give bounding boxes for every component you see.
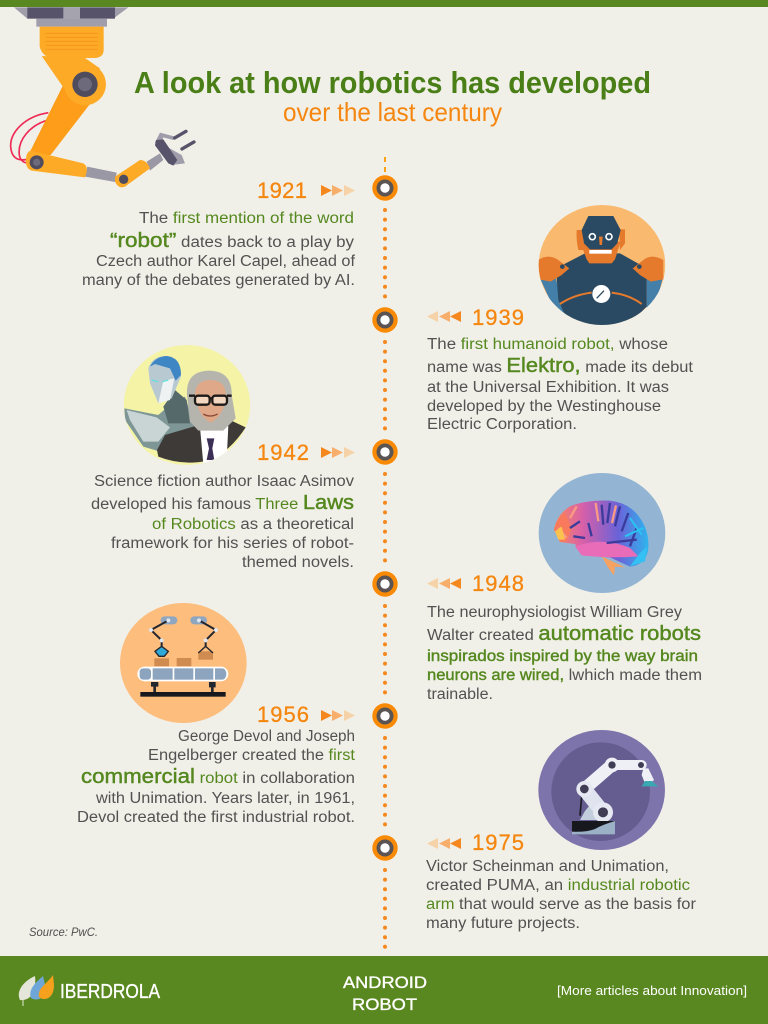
source note: Source: PwC. bbox=[29, 925, 98, 939]
panel: 1948 bbox=[427, 473, 702, 703]
text 1939: The first humanoid robot, whose bbox=[427, 336, 668, 353]
subtitle: over the last century bbox=[283, 97, 502, 127]
text 1921: many of the debates generated by AI. bbox=[82, 272, 355, 289]
top green bar bbox=[0, 0, 768, 7]
text 1956: commercial robot in collaboration bbox=[81, 765, 355, 788]
text 1939: at the Universal Exhibition. It was bbox=[427, 379, 669, 396]
text 1975 bbox=[426, 858, 696, 932]
text 1956: George Devol and Joseph bbox=[178, 728, 355, 745]
text 1921: The first mention of the word bbox=[139, 210, 354, 227]
arrows bbox=[427, 578, 461, 589]
icon: robot arm bbox=[11, 7, 194, 187]
text 1975: created PUMA, an industrial robotic bbox=[426, 877, 690, 894]
logo: Iberdrola: IBERDROLA bbox=[60, 981, 161, 1003]
node 1942 bbox=[372, 439, 398, 465]
panel: 1921 bbox=[82, 178, 356, 289]
node 1956 bbox=[372, 703, 398, 729]
text 1975: many future projects. bbox=[426, 915, 580, 932]
panel: 1956 bbox=[77, 603, 356, 826]
text 1975: arm that would serve as the basis for bbox=[426, 896, 696, 913]
text 1939: name was Elektro, made its debut bbox=[427, 354, 694, 377]
text 1956: Engelberger created the first bbox=[148, 747, 356, 764]
text 1942: framework for his series of robot- bbox=[111, 535, 354, 552]
year 1921: 1921 bbox=[257, 178, 307, 203]
footer title bbox=[343, 973, 427, 1014]
icon: industrial robot arm bbox=[538, 730, 665, 850]
text 1948 bbox=[427, 604, 702, 703]
text 1956 bbox=[77, 728, 356, 826]
text 1956: with Unimation. Years later, in 1961, bbox=[95, 790, 355, 807]
text 1948: Walter created automatic robots bbox=[427, 622, 701, 645]
text 1942 bbox=[91, 473, 354, 571]
text 1942: developed his famous Three Laws bbox=[91, 491, 354, 514]
text 1921: “robot” dates back to a play by bbox=[110, 229, 354, 252]
year 1956: 1956 bbox=[257, 702, 309, 727]
panel: 1975 bbox=[426, 730, 696, 932]
year 1939: 1939 bbox=[472, 305, 524, 330]
text 1975: Victor Scheinman and Unimation, bbox=[426, 858, 669, 875]
icon: Elektro robot bbox=[538, 205, 665, 326]
text 1942: Science fiction author Isaac Asimov bbox=[94, 473, 354, 490]
year 1942: 1942 bbox=[257, 440, 309, 465]
text 1942: of Robotics as a theoretical bbox=[152, 516, 354, 533]
text 1948: trainable. bbox=[427, 686, 493, 703]
title: A look at how robotics has developed bbox=[134, 65, 651, 100]
arrows bbox=[321, 710, 355, 721]
text 1948: neurons are wired, lwhich made them bbox=[427, 667, 702, 684]
text 1939 bbox=[427, 336, 694, 433]
node 1975 bbox=[372, 835, 398, 861]
icon: factory line bbox=[120, 603, 247, 723]
text 1921: Czech author Karel Capel, ahead of bbox=[96, 253, 356, 270]
node 1948 bbox=[372, 571, 398, 597]
logo: Iberdrola bbox=[19, 975, 161, 1006]
node 1921 bbox=[372, 175, 398, 201]
year 1948: 1948 bbox=[472, 571, 524, 596]
text 1939: developed by the Westinghouse bbox=[427, 398, 661, 415]
icon: brain bbox=[539, 473, 665, 593]
node 1939 bbox=[372, 307, 398, 333]
arrows bbox=[427, 311, 461, 322]
text 1942: themed novels. bbox=[242, 554, 354, 571]
footer link: [More articles about Innovation] bbox=[557, 983, 747, 998]
footer bbox=[0, 956, 768, 1024]
year 1975: 1975 bbox=[472, 830, 524, 855]
icon: Asimov and robot bbox=[124, 345, 250, 465]
footer title: ROBOT bbox=[352, 995, 417, 1014]
timeline bbox=[372, 157, 398, 952]
text 1921 bbox=[82, 210, 356, 289]
text 1948: inspirados inspired by the way brain bbox=[427, 648, 698, 665]
footer title: ANDROID bbox=[343, 973, 427, 992]
arrows bbox=[427, 838, 461, 849]
text 1939: Electric Corporation. bbox=[427, 416, 577, 433]
panel: 1942 bbox=[91, 345, 355, 571]
arrows bbox=[321, 447, 355, 458]
text 1956: Devol created the first industrial robot. bbox=[77, 809, 355, 826]
text 1948: The neurophysiologist William Grey bbox=[427, 604, 682, 621]
arrows bbox=[321, 185, 355, 196]
panel: 1939 bbox=[427, 205, 694, 433]
